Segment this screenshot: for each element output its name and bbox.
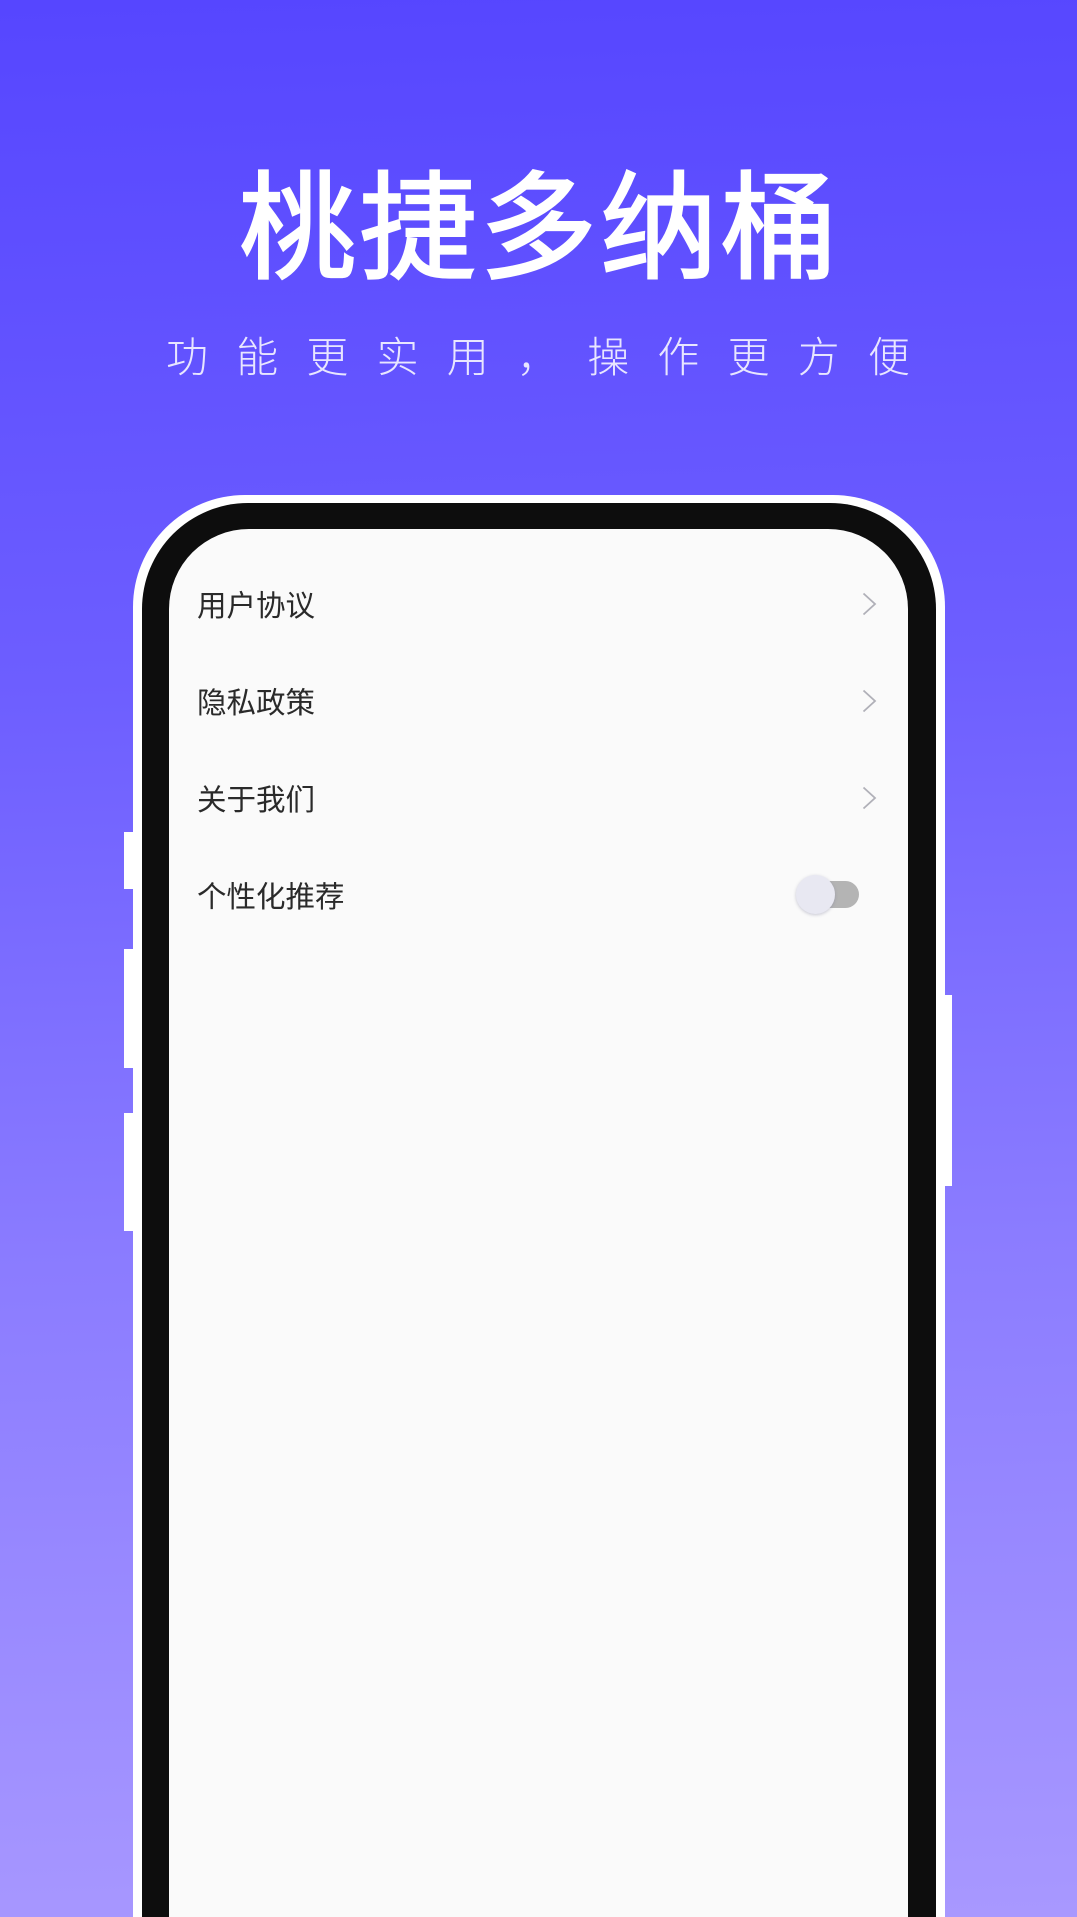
icon: left volume down button [124, 949, 138, 1068]
icon: left side button [124, 1113, 138, 1231]
icon: chevron 1 [863, 593, 876, 615]
icon: left volume up button [124, 832, 138, 889]
menu row: privacy policy: 隐私政策 [197, 687, 315, 720]
menu row: user agreement: 用户协议 [197, 590, 315, 623]
phone black bezel [142, 503, 936, 1917]
icon: toggle switch [794, 874, 859, 916]
title: 桃捷多纳桶 [239, 163, 841, 294]
toggle knob [796, 875, 835, 914]
panel: settings screen [169, 529, 908, 1917]
subtitle: 功能更实用，操作更方便 [166, 334, 938, 381]
icon: chevron 2 [863, 690, 876, 712]
menu row: personalised recommendation: 个性化推荐 [197, 881, 345, 914]
phone white frame [133, 495, 945, 1917]
toggle track [807, 881, 859, 908]
phone mockup [124, 495, 952, 1917]
icon: right power button [934, 995, 952, 1186]
icon: chevron 3 [863, 787, 876, 809]
menu row: about us: 关于我们 [197, 784, 315, 817]
